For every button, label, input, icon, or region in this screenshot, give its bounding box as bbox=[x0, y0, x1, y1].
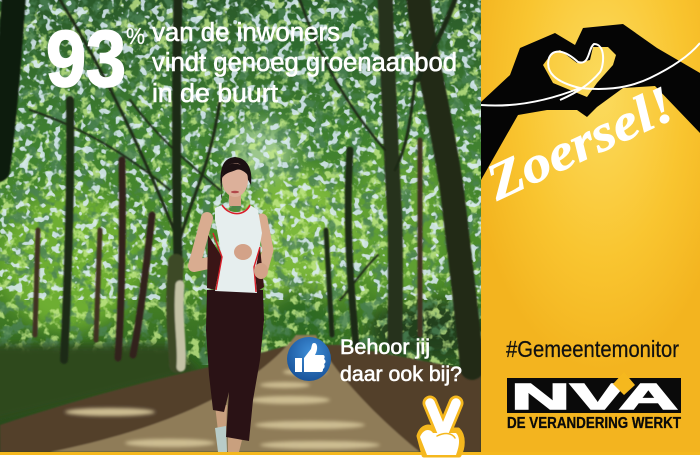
yellow bottom line bbox=[0, 452, 700, 455]
call to action text: daar ook bij? bbox=[340, 362, 462, 386]
white line with heart bbox=[481, 43, 700, 106]
runner arms bbox=[194, 218, 268, 268]
percent sign: % bbox=[126, 23, 145, 49]
ground and sunlit path bbox=[0, 335, 481, 452]
runner tank top bbox=[207, 235, 264, 293]
logo wordmark: NVA bbox=[511, 376, 678, 417]
hashtag: #Gemeentemonitor bbox=[506, 336, 679, 362]
script title: Zoersel!: Zoersel! bbox=[477, 76, 683, 212]
runner legs bbox=[206, 290, 264, 441]
runner shins and shoes bbox=[215, 405, 242, 452]
yellow side panel bbox=[481, 0, 700, 452]
runner bbox=[194, 157, 268, 452]
headline: 93 percent bbox=[46, 14, 457, 108]
headline text: in de buurt bbox=[152, 80, 278, 108]
logo diamond bbox=[613, 372, 635, 395]
background photo: forest path bbox=[0, 0, 490, 452]
headline text: van de inwoners bbox=[152, 19, 340, 47]
call to action text: Behoor jij bbox=[340, 335, 430, 359]
icon: victory hand bbox=[419, 403, 462, 455]
tree trunks bbox=[0, 0, 472, 368]
icon: heart hands bbox=[481, 24, 700, 180]
left undergrowth bbox=[0, 339, 196, 410]
runner hands bbox=[234, 244, 268, 279]
headline text bbox=[152, 19, 457, 108]
N-VA logo bbox=[507, 372, 681, 432]
runner head and hair bbox=[221, 157, 251, 206]
big number 93: 93 bbox=[46, 14, 126, 103]
icon: thumbs up badge bbox=[287, 337, 331, 381]
headline text: vindt genoeg groenaanbod bbox=[152, 49, 457, 77]
call to action text bbox=[340, 335, 462, 386]
